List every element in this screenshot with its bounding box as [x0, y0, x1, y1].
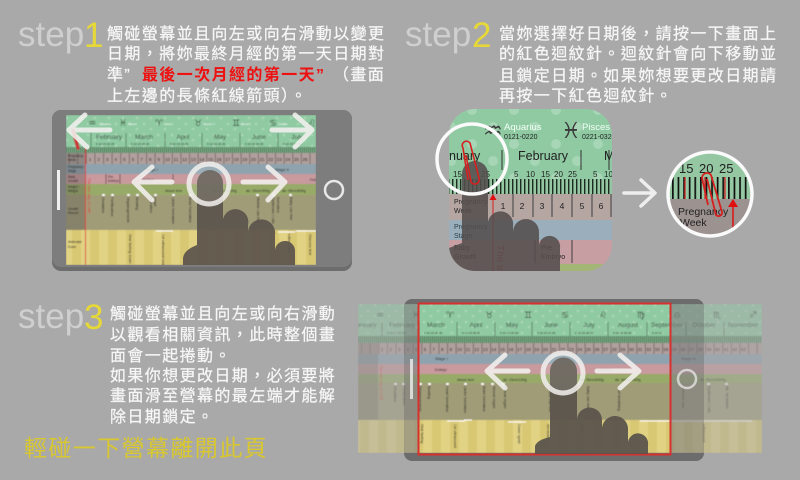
panel: step 2 zoomed screen: Stage	[454, 233, 472, 240]
heading: step 2: step	[405, 15, 471, 54]
fade: right scroll overlay	[670, 304, 762, 453]
chart: step 3 timeline: Sexual organ	[492, 386, 496, 408]
chart: step 3 timeline: July	[583, 322, 596, 329]
chart: step 3 timeline: 43	[741, 347, 746, 352]
chart: step 1 timeline screen: Baby	[68, 175, 76, 179]
chart: step 3 timeline: 16	[508, 347, 514, 352]
chart: step 1 timeline screen: Growth	[68, 207, 79, 211]
chart: step 3 timeline: Eyebrows / Lids	[707, 386, 711, 413]
chart: step 3 timeline: 5	[415, 347, 418, 352]
chart: step 1 timeline screen: 20	[251, 157, 256, 162]
chart: step 1 timeline screen: ab. 35cm/830g	[282, 189, 306, 193]
chart: step 3 timeline: 37	[689, 347, 695, 352]
chart: step 1 timeline screen: 26	[302, 157, 308, 162]
chart: step 1 timeline screen: 4	[115, 157, 118, 162]
chart: step 3 timeline: 29	[620, 347, 626, 352]
chart: step 3 timeline: November	[728, 322, 759, 329]
chart: step 3 timeline: 4	[407, 347, 410, 352]
text block: step 3 instructions: 畫面滑至營幕的最左端才能解	[110, 387, 336, 405]
panel: step 2 zoomed screen: 15	[453, 170, 462, 179]
heading: step 2: 2	[472, 16, 491, 55]
panel: step 2 zoomed screen: 15	[541, 170, 550, 179]
panel: step 2 zoomed screen: ♓︎	[561, 119, 581, 144]
chart: step 1 timeline screen: 17	[225, 157, 231, 162]
chart: step 3 timeline: 35	[672, 347, 677, 352]
text block: step 3 instructions: 以觀看相關資訊，此時整個畫	[110, 326, 336, 344]
chart: step 3 timeline: Sexual organ	[503, 386, 507, 408]
chart: step 1 timeline screen: Eyebrows / Lids	[271, 197, 275, 224]
chart: step 1 timeline screen: 5 10 15 20 25	[283, 142, 302, 146]
panel: step 2 zoomed screen	[437, 109, 616, 273]
chart: step 1 timeline screen: 22	[268, 157, 274, 162]
chart: step 3 timeline: 32	[646, 347, 652, 352]
chart: step 3 timeline: October	[692, 322, 716, 329]
panel: step 2 zoomed screen: Aquarius	[504, 122, 542, 133]
chart: step 3 timeline: January	[353, 322, 377, 329]
panel: step 2 zoomed screen: nuary	[449, 149, 481, 163]
chart: step 1 timeline screen: Ovulation	[101, 197, 105, 213]
icon: paperclip small	[73, 130, 78, 148]
chart: step 1 timeline screen: 2	[97, 157, 100, 162]
chart: step 1 timeline screen	[66, 115, 318, 268]
icon: side bar	[57, 170, 60, 210]
chart: step 1 timeline screen: 21	[259, 157, 265, 162]
chart: step 1 timeline screen: 5 10 15 20 25	[245, 142, 264, 146]
chart: step 3 timeline: May	[506, 322, 519, 329]
chart: step 1 timeline screen: Pre	[108, 175, 113, 179]
chart: step 3 timeline: 7	[432, 347, 435, 352]
chart: step 3 timeline: 12	[474, 347, 480, 352]
chart: step 1 timeline screen: 18	[234, 157, 239, 162]
panel: step 2 zoomed screen: The la	[494, 245, 505, 273]
chart: step 3 timeline: 5 10 15 20 25	[462, 331, 481, 335]
chart: step 1 timeline screen: ♓︎	[119, 119, 127, 129]
icon: finger	[535, 358, 648, 454]
chart: step 3 timeline: Beating	[427, 386, 431, 399]
chart: step 3 timeline: 3	[398, 347, 401, 352]
chart: step 3 timeline: 24	[577, 347, 583, 352]
arrow: right	[597, 355, 639, 388]
text block: step 2 instructions: 再按一下紅色迴紋針。	[499, 87, 673, 105]
chart: step 1 timeline screen: 15	[208, 157, 213, 162]
chart: step 3 timeline: 34	[663, 347, 669, 352]
chart: step 1 timeline screen: 9	[158, 157, 161, 162]
chart: step 3 timeline: 28	[612, 347, 617, 352]
chart: step 3 timeline: 5 10 15 20 25	[613, 331, 632, 335]
chart: step 1 timeline screen: 5	[123, 157, 126, 162]
panel: step 2 zoomed screen: Week	[454, 208, 472, 215]
chart: step 3 timeline: 39	[706, 347, 712, 352]
chart: step 3 timeline: ♎︎	[673, 311, 681, 321]
chart: step 1 timeline screen: Aquarius	[99, 122, 111, 126]
text block: step 1 instructions: 最後一次月經的第一天”	[142, 65, 325, 84]
chart: step 3 timeline: The last day of LMP	[379, 365, 384, 401]
chart: step 1 timeline screen: Fetus	[310, 178, 318, 182]
chart: step 3 timeline: ♍︎	[637, 311, 645, 321]
text block: step 3 instructions: 觸碰螢幕並且向左或向右滑動	[110, 305, 336, 323]
chart: step 3 timeline: Down syndr	[517, 424, 521, 445]
chart: step 1 timeline screen: Pregnancy	[68, 154, 84, 158]
chart: step 3 timeline: 40	[715, 347, 720, 352]
chart: step 3 timeline: Embryo	[435, 368, 447, 372]
chart: step 1 timeline screen: Gemini	[241, 122, 251, 126]
panel: step 2 zoomed screen: Baby	[454, 245, 470, 252]
panel: step 2 zoomed screen: Pre	[541, 245, 552, 252]
chart: step 3 timeline: February	[389, 322, 416, 329]
chart: step 3 timeline: About 4cm	[457, 378, 474, 382]
chart: step 1 timeline screen: Organogenesis	[126, 197, 130, 223]
chart: step 1 timeline screen: Pisces	[128, 122, 137, 126]
chart: step 3 timeline: 15	[500, 347, 505, 352]
panel: step 2 zoomed screen: 1	[501, 201, 506, 211]
text block: step 3 instructions	[110, 305, 336, 426]
chart: step 3 timeline: 42	[732, 347, 738, 352]
arrow: middle right	[243, 167, 285, 200]
chart: step 3 timeline: 5 10 15 20 25	[537, 331, 556, 335]
chart: step 3 timeline: ♊︎	[524, 311, 532, 321]
chart: step 3 timeline: Brain formation	[482, 386, 486, 412]
chart: step 1 timeline screen: May	[214, 134, 227, 141]
chart: step 1 timeline screen: Record	[68, 211, 79, 215]
chart: step 1 timeline screen: ♒︎	[88, 119, 96, 129]
icon: home button	[678, 370, 696, 388]
chart: step 1 timeline screen: 12	[182, 157, 188, 162]
chart: step 3 timeline: ab. 40cm/2000g	[615, 378, 641, 382]
panel: step 2 zoomed screen: 25	[568, 170, 577, 179]
chart: step 1 timeline screen: ab. 23cm/300g	[246, 189, 270, 193]
text block: step 1 instructions: 準”	[107, 66, 131, 84]
heading: step 3: step	[18, 297, 84, 336]
text block: step 2 instructions	[499, 25, 777, 105]
chart: step 3 timeline: 22	[560, 347, 566, 352]
chart: step 1 timeline screen: 6	[132, 157, 135, 162]
chart: step 3 timeline: 21	[551, 347, 557, 352]
chart: step 3 timeline: 5 10 15 20 25	[575, 331, 594, 335]
icon: side bar	[410, 359, 413, 399]
chart: step 1 timeline screen: ♈︎	[155, 119, 164, 129]
panel: step 2 zoomed screen: 2	[520, 201, 525, 211]
chart: step 1 timeline screen: February	[96, 134, 123, 141]
panel: step 2 zoomed screen: Pregnancy	[454, 224, 488, 231]
chart: step 3 timeline: Embryo	[600, 368, 612, 372]
icon: paperclip	[702, 173, 722, 216]
panel: step 2 zoomed screen: 3	[540, 201, 545, 211]
panel: step 2 zoomed screen: 5	[580, 201, 585, 211]
chart: step 3 timeline: ♓︎	[412, 311, 420, 321]
chart: step 3 timeline: 11	[466, 347, 471, 352]
chart: step 1 timeline screen: 5 10 15 20 25	[207, 142, 226, 146]
chart: step 3 timeline: 5 10 15	[652, 331, 662, 335]
panel: step 2 zoomed screen: 25	[481, 170, 490, 179]
chart: step 1 timeline screen: 10	[165, 157, 170, 162]
chart: step 1 timeline screen: Height /	[68, 185, 79, 189]
highlight frame	[418, 304, 670, 454]
chart: step 1 timeline screen: ab. 15cm/100g	[213, 189, 237, 193]
chart: step 3 timeline: 2	[389, 347, 392, 352]
arrow: middle left	[134, 167, 172, 200]
chart: step 3 timeline: Ovulation	[393, 386, 397, 402]
chart: step 1 timeline screen: Heart	[153, 197, 157, 207]
chart: step 1 timeline screen: ♋︎	[269, 119, 277, 129]
chart: step 3 timeline: Ab. fat added	[725, 386, 729, 409]
text block: step 1 instructions	[107, 25, 385, 105]
arrow: top left	[69, 115, 110, 147]
exit prompt: 輕碰一下營幕離開此頁	[24, 435, 268, 461]
chart: step 3 timeline: September	[651, 322, 684, 329]
panel: right magnifier: 25	[719, 161, 733, 176]
chart: step 1 timeline screen: formation	[276, 197, 280, 213]
chart: step 3 timeline: June	[544, 322, 558, 329]
panel: step 2 zoomed screen: 0121-0220	[504, 134, 538, 141]
text block: step 2 instructions: 當妳選擇好日期後，請按一下畫面上	[499, 25, 777, 43]
chart: step 3 timeline: 25	[586, 347, 591, 352]
text block: step 3 instructions: 除日期鎖定。	[110, 408, 214, 426]
text block: step 2 instructions: 且鎖定日期。如果妳想要更改日期請	[499, 67, 777, 85]
chart: step 1 timeline screen: Limbs formation	[171, 197, 175, 224]
panel: step 2 zoomed screen: 10	[604, 170, 613, 179]
panel: step 2 zoomed screen: 4	[560, 201, 565, 211]
chart: step 1 timeline screen: Glucose test	[308, 234, 312, 256]
chart: step 3 timeline: 1	[381, 347, 384, 352]
heading: step 3: 3	[84, 298, 103, 337]
panel: step 2 zoomed screen: M	[604, 149, 614, 163]
chart: step 1 timeline screen: Mother can feel	[256, 197, 260, 223]
chart: step 1 timeline screen: Stage	[68, 169, 77, 173]
chart: step 3 timeline: 5 10 15 20 25	[424, 331, 443, 335]
chart: step 3 timeline: ♌︎	[599, 311, 607, 321]
text block: step 2 instructions: 的紅色迴紋針。迴紋針會向下移動並	[499, 45, 777, 63]
panel: step 2 zoomed screen: Embryo	[541, 254, 565, 261]
chart: step 3 timeline: Ultrasound	[702, 424, 706, 442]
chart: step 1 timeline screen: 16	[216, 157, 222, 162]
icon: finger	[449, 161, 560, 271]
chart: step 1 timeline screen: Oral fasting exam	[128, 234, 132, 264]
chart: step 3 timeline: 19	[534, 347, 540, 352]
chart: step 3 timeline: 27	[603, 347, 609, 352]
chart: step 3 timeline: Oral fasting	[420, 424, 424, 443]
shade: phone body left	[404, 304, 418, 453]
chart: step 1 timeline screen: About 4cm	[165, 189, 182, 193]
chart: step 1 timeline screen: Embryo	[108, 179, 119, 183]
panel: right magnifier: 15	[679, 161, 693, 176]
panel: step 2 zoomed screen: 20	[554, 170, 563, 179]
chart: step 1 timeline screen: Cancer	[278, 122, 288, 126]
chart: step 1 timeline screen: 24	[285, 157, 291, 162]
chart: step 3 timeline: 38	[698, 347, 703, 352]
chart: step 3 timeline: 5 10 15 20 25	[500, 331, 519, 335]
chart: step 1 timeline screen: 23	[277, 157, 282, 162]
chart: step 3 timeline: Stage I	[435, 356, 448, 361]
chart: step 3 timeline: 33	[655, 347, 660, 352]
chart: step 1 timeline screen: Weight	[68, 189, 78, 193]
chart: step 1 timeline screen: 1	[89, 157, 92, 162]
chart: step 1 timeline screen: The last day of LMP	[87, 178, 92, 214]
chart: step 1 timeline screen: Taurus	[203, 122, 213, 126]
icon: home button	[325, 181, 343, 199]
chart: step 3 timeline: ab. 50cm/3000g	[700, 378, 726, 382]
icon: touch ring	[543, 353, 583, 393]
panel: step 2 zoomed screen: 0221-0320	[582, 134, 616, 141]
chart: step 3 timeline: 31	[637, 347, 643, 352]
panel: step 2 zoomed screen: 10	[526, 170, 535, 179]
chart: step 3 timeline: August	[618, 322, 638, 329]
chart: step 3 timeline: 5 10 15 20 25	[387, 331, 406, 335]
panel: step 2 zoomed screen: Pisces	[582, 122, 610, 133]
chart: step 3 timeline: 26	[594, 347, 600, 352]
panel: step 2 zoomed screen: February	[518, 149, 569, 163]
panel: right magnifier	[668, 152, 752, 236]
panel: step 2 zoomed screen: ♒︎	[483, 119, 503, 144]
chart: step 1 timeline screen: June	[252, 134, 266, 141]
chart: step 3 timeline: ♏︎	[713, 311, 721, 321]
chart: step 3 timeline: Start breathing	[617, 386, 621, 411]
chart: step 3 timeline: April	[469, 322, 483, 329]
chart: step 1 timeline screen: Antenatal	[68, 240, 82, 244]
panel: step 1 phone	[52, 110, 352, 271]
text block: step 1 instructions: （畫面	[333, 66, 385, 84]
chart: step 1 timeline screen: Stage II	[275, 167, 289, 172]
chart: step 1 timeline screen: 11	[174, 157, 179, 162]
chart: step 1 timeline screen: Embryo	[143, 178, 154, 182]
chart: step 3 timeline: 41	[723, 347, 729, 352]
chart: step 3 timeline: 1st ultrasound	[453, 424, 457, 448]
chart: step 3 timeline: 17	[517, 347, 523, 352]
chart: step 1 timeline screen: 1st ultrasound exam	[161, 234, 165, 268]
chart: step 1 timeline screen: Beating	[135, 197, 139, 210]
chart: step 3 timeline: 20	[543, 347, 548, 352]
chart: step 3 timeline: ab. 35cm/830g	[580, 378, 604, 382]
chart: step 3 timeline: Wrinkled skin	[681, 386, 685, 409]
text block: step 1 instructions: 日期，將妳最終月經的第一天日期對	[107, 44, 385, 63]
chart: step 3 timeline: 23	[569, 347, 574, 352]
chart: step 3 timeline: Heart formation	[445, 386, 449, 412]
chart: step 1 timeline screen: 3	[106, 157, 109, 162]
chart: step 3 timeline: ♐︎	[749, 311, 757, 321]
heading: step 1: step	[18, 15, 84, 54]
chart: step 1 timeline screen: Stage I	[145, 167, 158, 172]
chart: step 1 timeline screen: 8	[149, 157, 152, 162]
chart: step 1 timeline screen: Baby can feel	[289, 197, 293, 220]
chart: step 3 timeline: ab. 15cm/100g	[503, 378, 527, 382]
text block: step 3 instructions: 面會一起捲動。	[110, 347, 232, 365]
chart: step 1 timeline screen: Growth	[68, 179, 79, 183]
arrow: zoom direction	[624, 180, 655, 206]
panel: step 2 zoomed screen: 6	[599, 201, 604, 211]
chart: step 1 timeline screen: Week	[68, 158, 76, 162]
chart: step 1 timeline screen: formation	[149, 197, 153, 213]
panel: right magnifier: Week	[680, 217, 707, 229]
chart: step 3 timeline: Baby can feel	[586, 386, 590, 409]
icon: left magnifier with paperclip	[437, 124, 507, 194]
heading: step 1: 1	[84, 16, 103, 55]
fade: left scroll overlay	[358, 304, 418, 453]
chart: step 1 timeline screen: 7	[140, 157, 143, 162]
icon: finger	[183, 170, 295, 265]
icon: red arrow	[490, 194, 496, 271]
icon: touch ring	[189, 164, 229, 204]
chart: step 3 timeline	[353, 304, 762, 453]
chart: step 3 timeline: 6	[424, 347, 427, 352]
chart: step 3 timeline: Stage III	[681, 356, 696, 361]
panel: right magnifier: Pregnancy	[678, 206, 729, 218]
chart: step 1 timeline screen: 5 10 15 20 25	[170, 142, 189, 146]
chart: step 3 timeline: ♉︎	[485, 311, 493, 321]
chart: step 1 timeline screen: Ultrasound	[287, 234, 291, 252]
chart: step 3 timeline: 10	[457, 347, 462, 352]
panel: step 2 zoomed screen: Pregnancy	[454, 199, 488, 206]
text block: step 3 instructions: 如果你想更改日期，必須要將	[110, 367, 336, 385]
panel: step 2 zoomed screen: 5	[514, 170, 519, 179]
text block: step 1 instructions: 上左邊的長條紅線箭頭）。	[107, 86, 308, 105]
chart: step 3 timeline: 36	[680, 347, 686, 352]
chart: step 3 timeline: Fertilization	[402, 386, 406, 405]
chart: step 1 timeline screen: Aries	[164, 122, 171, 126]
panel: step 2 zoomed screen: 5	[593, 170, 598, 179]
chart: step 3 timeline: 18	[526, 347, 531, 352]
chart: step 1 timeline screen: 5 10 15 20 25	[131, 142, 150, 146]
chart: step 1 timeline screen: Fertilization	[110, 197, 114, 216]
chart: step 1 timeline screen: ♉︎	[194, 119, 202, 129]
text block: step 1 instructions: 觸碰螢幕並且向左或向右滑動以變更	[107, 25, 385, 43]
shade: phone body right	[670, 304, 704, 453]
chart: step 3 timeline: Exam	[580, 424, 584, 434]
chart: step 1 timeline screen: ♌︎	[308, 119, 316, 129]
chart: step 1 timeline screen: 25	[294, 157, 299, 162]
chart: step 3 timeline: Limbs formation	[463, 386, 467, 413]
chart: step 3 timeline: Mother can feel	[548, 386, 552, 412]
chart: step 3 timeline: 13	[483, 347, 488, 352]
chart: step 3 timeline: March	[427, 322, 445, 329]
panel: right magnifier: 20	[699, 161, 713, 176]
chart: step 3 timeline: 14	[491, 347, 497, 352]
chart: step 1 timeline screen: Pregnancy	[68, 165, 84, 169]
chart: step 3 timeline: Organogenesis	[418, 386, 422, 412]
chart: step 1 timeline screen: 13	[191, 157, 196, 162]
chart: step 3 timeline: 9	[450, 347, 453, 352]
chart: step 3 timeline: 30	[629, 347, 634, 352]
chart: step 1 timeline screen: Brain formation	[188, 197, 192, 223]
icon: red arrow	[728, 199, 738, 228]
arrow: top right	[272, 115, 312, 147]
chart: step 1 timeline screen: April	[176, 134, 190, 141]
chart: step 1 timeline screen: July	[291, 134, 304, 141]
chart: step 3 timeline: ♋︎	[561, 311, 569, 321]
chart: step 1 timeline screen: March	[135, 134, 153, 141]
chart: step 1 timeline screen: Exam	[68, 245, 76, 249]
chart: step 1 timeline screen: 19	[242, 157, 248, 162]
chart: step 3 timeline: Amniotic	[546, 424, 550, 439]
chart: step 3 timeline: 8	[441, 347, 444, 352]
chart: step 3 timeline: ♈︎	[446, 311, 455, 321]
arrow: left	[487, 355, 528, 388]
chart: step 1 timeline screen: 5 10 15 20 25	[96, 142, 115, 146]
chart: step 3 timeline: ♒︎	[376, 311, 384, 321]
panel: step 3 phone and scrolling chart	[353, 299, 762, 461]
chart: step 1 timeline screen: 14	[199, 157, 205, 162]
chart: step 1 timeline screen: ♊︎	[232, 119, 240, 129]
panel: step 2 zoomed screen: Growth	[454, 254, 477, 261]
